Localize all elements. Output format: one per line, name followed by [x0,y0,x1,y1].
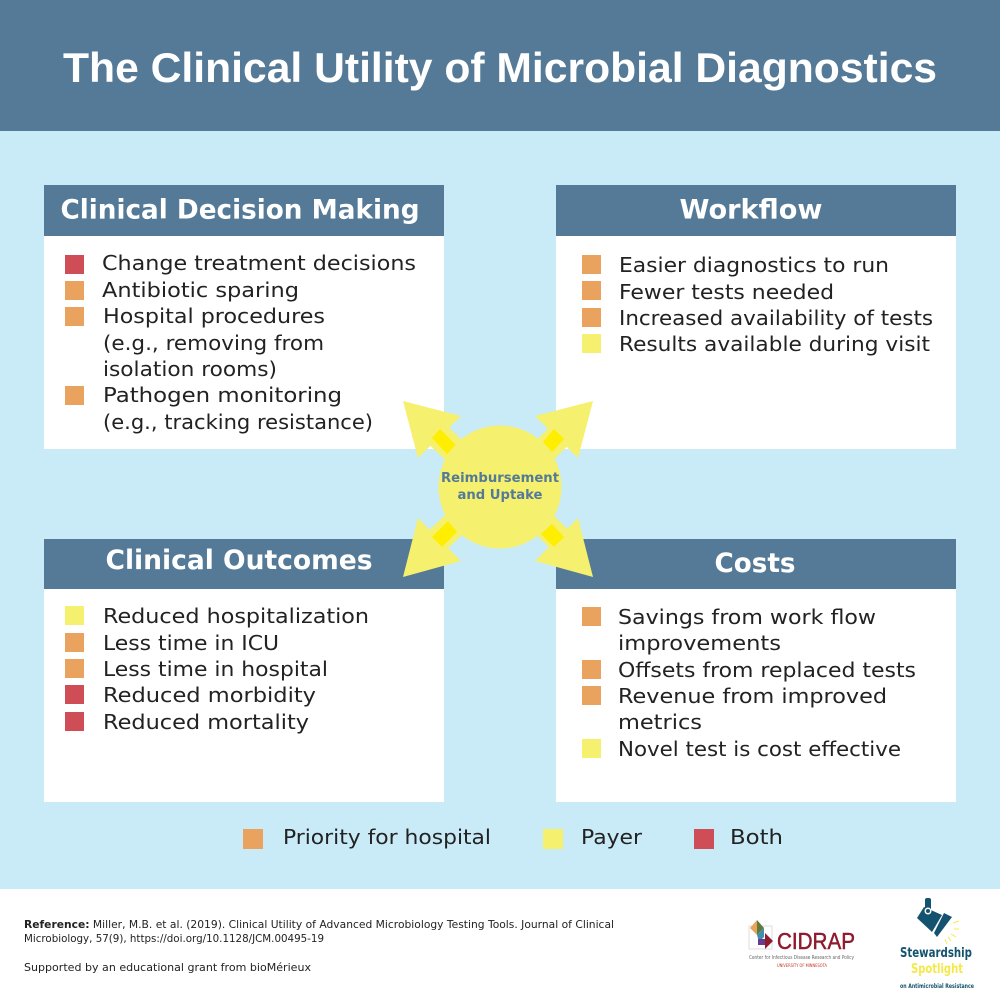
arrow: bottom left [403,505,475,577]
logo: CIDRAP: CIDRAP [777,928,855,954]
panel: clinical outcomes [44,539,444,802]
panel: costs: Offsets from replaced tests [618,658,916,682]
panel: workflow: Increased availability of tests [619,306,933,330]
panel: clinical decision making: Change treatment decisions [102,251,416,275]
central hub with arrows [403,401,593,577]
logo: CIDRAP [749,920,855,968]
panel: clinical outcomes: Clinical Outcomes [106,545,372,576]
background band [0,131,1000,889]
title banner [0,0,1000,131]
legend: Priority for hospital [283,825,491,849]
panel: clinical decision making: (e.g., removing from [103,331,324,355]
logo: CIDRAP: Center for Infectious Disease Research and Policy [749,955,855,961]
logo: CIDRAP: UNIVERSITY OF MINNESOTA [777,963,827,968]
reference text: Reference: Miller, M.B. et al. (2019). Clinical Utility of Advanced Microbiology Testing Tools. Journal of Clinical [24,918,614,931]
hub label: and Uptake [458,487,542,503]
panel: clinical outcomes: Reduced morbidity [103,683,316,707]
legend: Payer [581,825,643,849]
panel: workflow: Fewer tests needed [619,280,834,304]
panel: costs [556,539,956,802]
logo: Stewardship Spotlight [900,898,974,990]
hub label: Reimbursement [441,470,560,486]
panel: clinical decision making: Pathogen monitoring [103,383,342,407]
legend: Both [730,825,783,849]
panel: costs: improvements [618,631,781,655]
panel: clinical outcomes: Less time in hospital [103,657,328,681]
arrow: top left [403,401,475,470]
panel: costs: Costs [714,548,796,579]
circle [438,426,562,548]
reference text: Supported by an educational grant from bioMérieux [24,961,311,974]
title banner: The Clinical Utility of Microbial Diagnostics [63,44,937,91]
panel: workflow [556,185,956,449]
panel: clinical decision making [44,185,444,449]
panel: costs: Novel test is cost effective [618,737,901,761]
panel: clinical decision making: isolation rooms) [103,357,277,381]
panel: costs: metrics [618,710,702,734]
panel: costs: Revenue from improved [618,684,887,708]
panel: clinical outcomes: Reduced hospitalization [103,604,369,628]
panel: clinical decision making: Clinical Decision Making [60,194,420,226]
panel: clinical outcomes: Less time in ICU [103,631,279,655]
logo: Stewardship Spotlight: Stewardship [900,946,972,961]
legend [243,825,783,849]
panel: costs: Savings from work flow [618,605,876,629]
panel: clinical outcomes: Reduced mortality [103,710,309,734]
hub label [441,470,560,503]
panel: clinical decision making: Hospital procedures [103,304,325,328]
panel: workflow: Workflow [680,194,822,226]
arrow: bottom right [525,505,593,577]
logo: Stewardship Spotlight: Spotlight [911,962,963,977]
reference text [24,918,614,974]
panel: workflow: Easier diagnostics to run [619,253,889,277]
reference text: Microbiology, 57(9), https://doi.org/10.1128/JCM.00495-19 [24,932,324,945]
logo: Stewardship Spotlight: on Antimicrobial Resistance [900,983,974,990]
panel: workflow: Results available during visit [619,332,930,356]
arrow: top right [525,401,593,470]
panel: clinical decision making: (e.g., tracking resistance) [103,410,373,434]
panel: clinical decision making: Antibiotic sparing [102,278,299,302]
